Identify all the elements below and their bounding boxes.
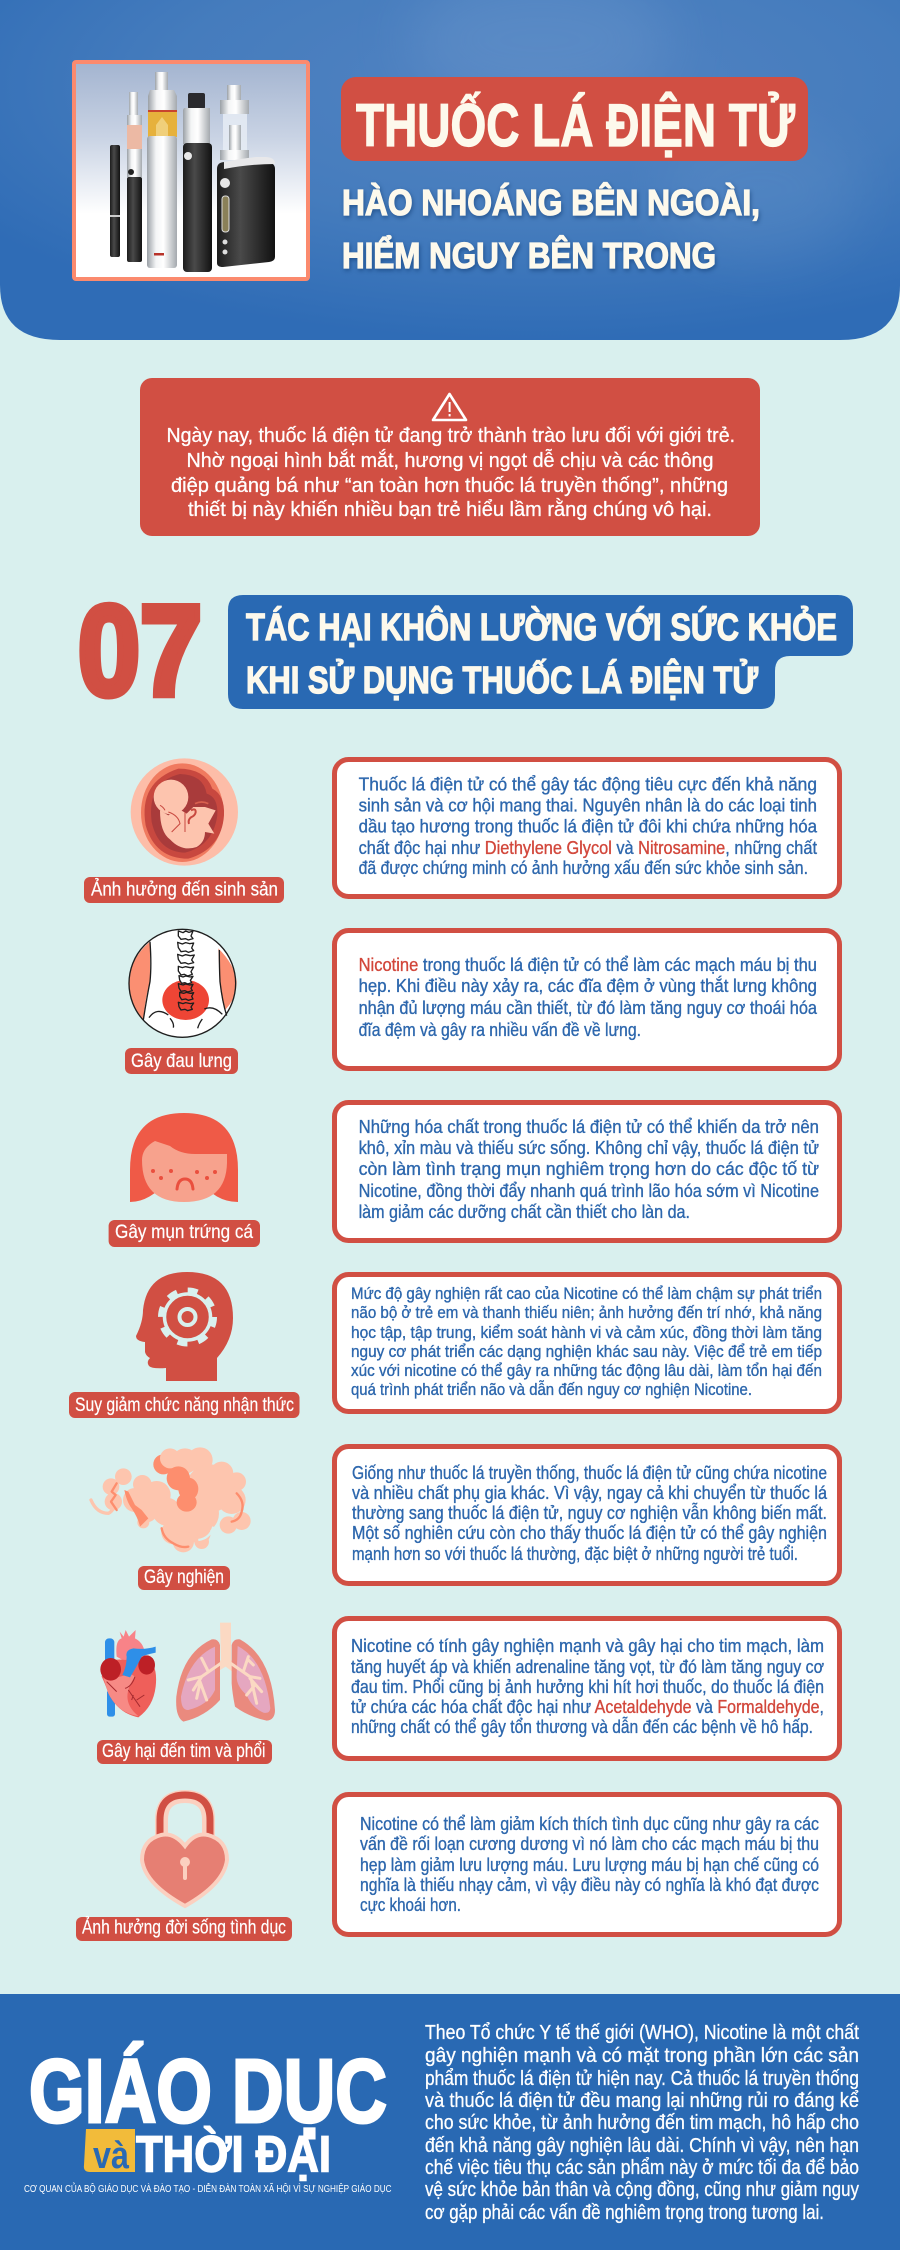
item 6: heart and lungs: [97, 1618, 840, 1764]
section number 07: 07: [78, 580, 202, 723]
card text: sinh sản và cơ hội mang thai. Nguyên nhân là do các loại tinh: [359, 796, 817, 816]
icon: warning triangle: [433, 394, 466, 420]
label: Suy giảm chức năng nhận thức: [75, 1394, 294, 1416]
item 1: reproductive: [84, 758, 840, 903]
logo: Giáo dục và Thời đại: THỜI ĐẠI: [136, 2126, 331, 2182]
card text: Những hóa chất trong thuốc lá điện tử có thể khiến da trở nên: [359, 1117, 819, 1137]
icon: head with gear: [136, 1272, 233, 1381]
card text: thường sang thuốc lá điện tử, nguy cơ nghiện vẫn không biến mất.: [352, 1502, 827, 1523]
card text: Giống như thuốc lá truyền thống, thuốc lá điện tử cũng chứa nicotine: [352, 1463, 827, 1483]
product photo: e-cigarettes: [74, 62, 308, 279]
section heading: [228, 595, 853, 709]
warning text: điệp quảng bá như “an toàn hơn thuốc lá truyền thống”, những: [171, 474, 728, 497]
card text: nghĩa là thiếu nhạy cảm, vì vậy điều này có nghĩa là khó đạt được: [360, 1875, 819, 1895]
card text: vấn đề rối loạn cương dương vì nó làm cho các mạch máu bị thu: [360, 1834, 819, 1854]
card text: xúc với nicotine có thể gây ra những tác động lâu dài, làm tổn hại đến: [351, 1362, 822, 1380]
logo: Giáo dục và Thời đại: và: [93, 2135, 130, 2177]
footer text: và thuốc lá điện tử đều mang lại những rủi ro đáng kể: [425, 2089, 859, 2112]
label: Ảnh hưởng đến sinh sản: [91, 878, 278, 900]
icon: face with acne: [130, 1113, 238, 1202]
logo: Giáo dục và Thời đại: CƠ QUAN CỦA BỘ GIÁO DỤC VÀ ĐÀO TẠO - DIỄN ĐÀN TOÀN XÃ HỘI VÌ SỰ NGHIỆP GIÁO DỤC: [24, 2182, 392, 2195]
card text: tăng huyết áp và khiến adrenaline tăng vọt, từ đó làm tăng nguy cơ: [351, 1657, 824, 1677]
card text: và nhiều chất phụ gia khác. Vì vậy, ngay cả khi chuyển từ thuốc lá: [352, 1483, 828, 1503]
card text: Nicotine có thể làm giảm kích thích tình dục cũng như gây ra các: [360, 1814, 819, 1834]
subtitle: [342, 181, 760, 276]
card text: [334, 1618, 840, 1758]
subtitle: HIỂM NGUY BÊN TRONG: [342, 234, 716, 276]
item 3: acne: [109, 1102, 840, 1247]
warning text: Nhờ ngoại hình bắt mắt, hương vị ngọt dễ chịu và các thông: [186, 449, 714, 472]
card text: còn làm tình trạng mụn nghiêm trọng hơn do các độc tố từ: [359, 1159, 819, 1179]
icon: spine: [129, 929, 237, 1037]
icon: fetus: [131, 758, 238, 866]
icon: heart: [100, 1630, 156, 1717]
card text: [334, 1446, 840, 1584]
title badge: [341, 77, 808, 161]
footer text: cơ gặp phải các vấn đề nghiêm trọng trong tương lai.: [425, 2201, 824, 2224]
card text: [334, 1102, 840, 1240]
card text: cực khoái hơn.: [360, 1895, 461, 1915]
icon: heart padlock: [142, 1795, 227, 1906]
card text: quá trình phát triển não và dẫn đến nguy cơ nghiện Nicotine.: [351, 1380, 752, 1399]
section heading: KHI SỬ DỤNG THUỐC LÁ ĐIỆN TỬ: [246, 657, 758, 702]
label: Gây đau lưng: [131, 1050, 232, 1072]
card text: nguy cơ phát triển các dạng nghiện khác sau này. Việc để trẻ em tiếp: [351, 1343, 822, 1361]
card text: mạnh hơn so với thuốc lá thường, đặc biệt ở những người trẻ tuổi.: [352, 1544, 798, 1564]
card text: hẹp. Khi điều này xảy ra, các đĩa đệm ở vùng thắt lưng không: [359, 975, 817, 996]
card text: Nicotine có tính gây nghiện mạnh và gây hại cho tim mạch, làm: [351, 1636, 824, 1656]
card text: làm giảm các dưỡng chất cần thiết cho làn da.: [359, 1202, 690, 1222]
card text: nhận đủ lượng máu cần thiết, từ đó làm tăng nguy cơ thoái hóa: [359, 998, 818, 1018]
card text: đau tim. Phổi cũng bị ảnh hưởng khi hít hơi thuốc, do thuốc lá điện: [351, 1677, 824, 1697]
card text: não bộ ở trẻ em và thanh thiếu niên; ảnh hưởng đến trí nhớ, khả năng: [351, 1304, 822, 1322]
card text: những chất có thể gây tổn thương và dẫn đến các bệnh về hô hấp.: [351, 1716, 813, 1737]
card text: đĩa đệm và gây ra nhiều vấn đề về lưng.: [359, 1020, 641, 1040]
label: Gây nghiện: [144, 1566, 224, 1588]
label: Ảnh hưởng đời sống tình dục: [82, 1916, 286, 1938]
warning text: Ngày nay, thuốc lá điện tử đang trở thành trào lưu đối với giới trẻ.: [166, 424, 735, 447]
card text: Nicotine, đồng thời đẩy nhanh quá trình lão hóa sớm vì Nicotine: [359, 1181, 819, 1201]
card text: [334, 1274, 840, 1412]
item 2: back pain: [125, 929, 840, 1074]
label: Gây hại đến tim và phổi: [102, 1740, 266, 1762]
card text: chất độc hại như Diethylene Glycol và Nitrosamine, những chất: [359, 838, 817, 858]
logo: Giáo dục và Thời đại: [24, 2041, 392, 2195]
card text: khô, xỉn màu và thiếu sức sống. Không chỉ vậy, thuốc lá điện tử: [359, 1138, 819, 1158]
card text: [334, 760, 840, 896]
item 7: sexual health: [76, 1794, 840, 1941]
card text: Một số nghiên cứu còn cho thấy thuốc lá điện tử có thể gây nghiện: [352, 1523, 827, 1543]
footer: [0, 1994, 900, 2250]
card text: học tập, tập trung, kiểm soát hành vi và cảm xúc, đồng thời làm tăng: [351, 1324, 822, 1342]
item 5: addiction: [91, 1446, 840, 1590]
warning panel: [140, 378, 760, 536]
card text: [334, 930, 840, 1068]
label: Gây mụn trứng cá: [115, 1221, 253, 1243]
logo: Giáo dục và Thời đại: GIÁO DỤC: [29, 2041, 387, 2142]
card text: hẹp làm giảm lưu lượng máu. Lưu lượng máu bị hạn chế cũng có: [360, 1855, 819, 1875]
footer text: gây nghiện mạnh và có mặt trong phần lớn các sản: [425, 2044, 859, 2067]
card text: Mức độ gây nghiện rất cao của Nicotine có thể làm chậm sự phát triển: [351, 1285, 822, 1303]
subtitle: HÀO NHOÁNG BÊN NGOÀI,: [342, 181, 760, 223]
icon: lungs: [176, 1623, 275, 1722]
header banner: [0, 0, 900, 340]
card text: đã được chứng minh có ảnh hưởng xấu đến sức khỏe sinh sản.: [359, 858, 808, 878]
footer text: [425, 2021, 860, 2224]
icon: smoke cloud: [91, 1447, 251, 1552]
card text: [334, 1794, 840, 1934]
warning text: thiết bị này khiến nhiều bạn trẻ hiểu lầm rằng chúng vô hại.: [188, 498, 712, 521]
card text: dầu tạo hương trong thuốc lá điện tử đôi khi chứa những hóa: [359, 817, 818, 837]
card text: Thuốc lá điện tử có thể gây tác động tiêu cực đến khả năng: [359, 775, 817, 795]
warning text: [166, 424, 735, 521]
card text: tử chứa các hóa chất độc hại như Acetaldehyde và Formaldehyde,: [351, 1697, 824, 1717]
item 4: cognition: [69, 1272, 840, 1418]
card text: Nicotine trong thuốc lá điện tử có thể làm các mạch máu bị thu: [359, 955, 817, 975]
